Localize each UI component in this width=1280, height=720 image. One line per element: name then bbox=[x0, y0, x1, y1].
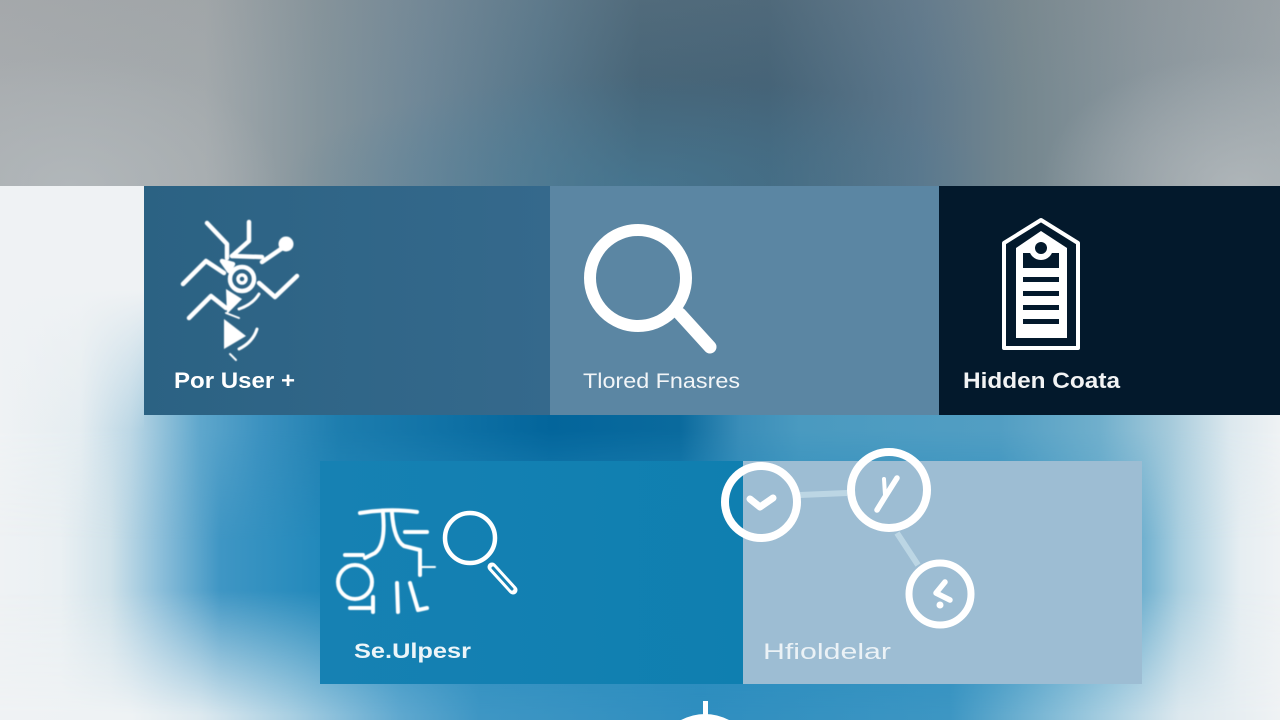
label: Por User +: Por User + bbox=[174, 368, 295, 393]
icon: document tag bbox=[1004, 220, 1078, 348]
panel: Hfioldelar bbox=[725, 452, 1142, 684]
panel: Tlored Fnasres bbox=[550, 186, 939, 415]
top gradient band bbox=[0, 0, 1280, 186]
label: Hfioldelar: Hfioldelar bbox=[763, 639, 891, 664]
label: Hidden Coata: Hidden Coata bbox=[963, 368, 1121, 393]
node: fork bbox=[851, 452, 927, 528]
icon: cropped pin at bottom edge bbox=[681, 701, 729, 720]
icon: small magnifying glass bbox=[445, 513, 513, 590]
page background with blue glow bbox=[64, 306, 1258, 720]
node: check bbox=[725, 466, 797, 538]
node: symbol bbox=[909, 563, 971, 625]
icon: magnifying glass bbox=[590, 230, 710, 347]
panel: Hidden Coata bbox=[939, 186, 1280, 415]
label: Tlored Fnasres: Tlored Fnasres bbox=[583, 370, 740, 393]
connector lines bbox=[800, 493, 918, 565]
icon: ant figure bbox=[183, 222, 297, 360]
icon: person with nodes bbox=[338, 510, 435, 612]
panel: Se.Ulpesr bbox=[320, 461, 743, 684]
panel: Por User bbox=[144, 186, 550, 415]
label: Se.Ulpesr: Se.Ulpesr bbox=[354, 640, 471, 663]
